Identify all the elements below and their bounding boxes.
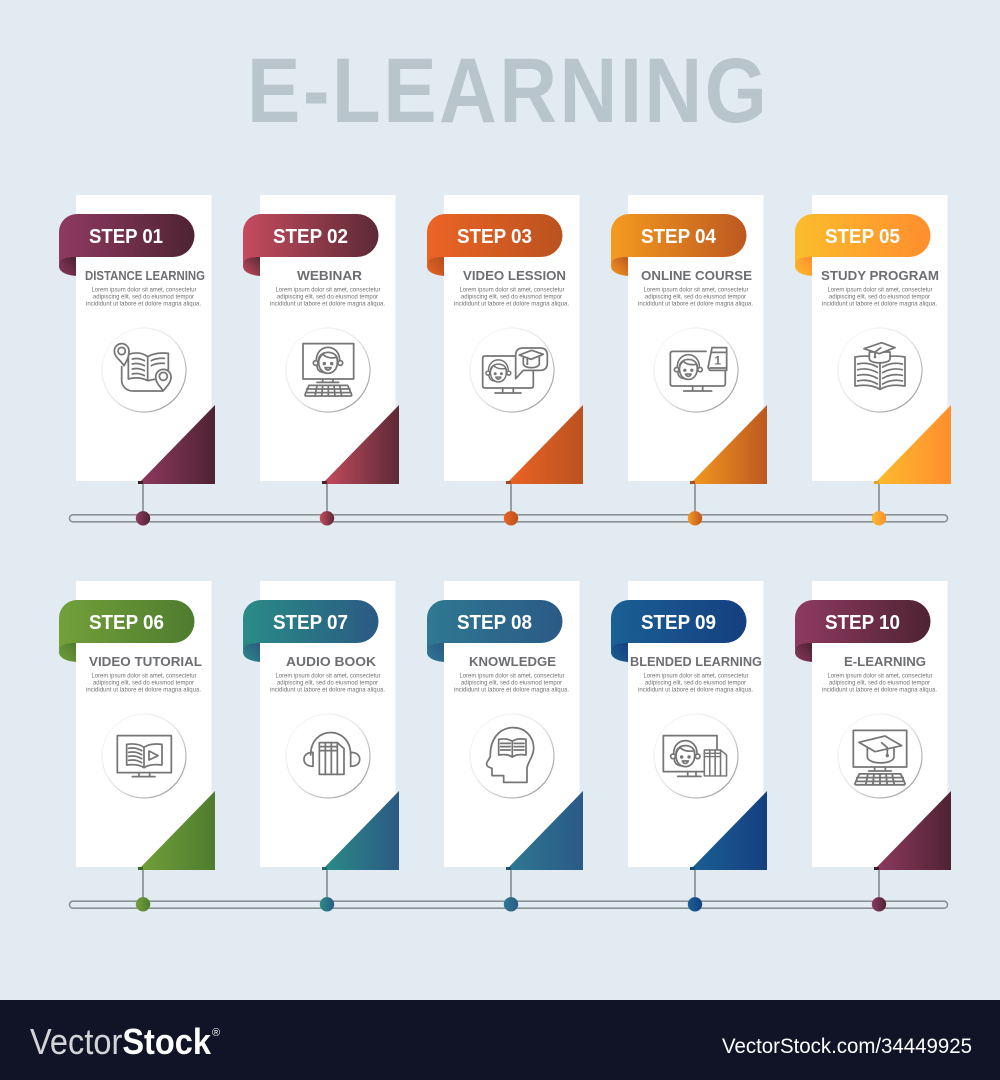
ribbon [243,600,378,662]
heading: ONLINE COURSE [641,268,752,283]
step label: STEP 07 [273,611,348,634]
corner triangle [138,405,215,484]
body text: incididunt ut labore et dolore magna aliqua. [270,686,385,694]
step label: STEP 06 [89,611,164,634]
panel: step 05 [795,195,951,526]
body text: incididunt ut labore et dolore magna aliqua. [270,300,385,308]
body text: adipiscing elit, sed do eiusmod tempor [829,294,931,300]
card [260,195,396,481]
body text: adipiscing elit, sed do eiusmod tempor [645,680,747,686]
body text [86,286,201,308]
card [444,195,580,481]
ribbon [59,600,194,662]
body text: incididunt ut labore et dolore magna aliqua. [822,300,937,308]
panel: step 09 [611,581,767,912]
body text: Lorem ipsum dolor sit amet, consectetur [92,286,197,294]
ribbon [611,214,746,276]
card [444,581,580,867]
body text: Lorem ipsum dolor sit amet, consectetur [92,672,197,680]
panel: step 07 [243,581,399,912]
ribbon [243,214,378,276]
corner triangle [874,791,951,870]
connector stem [142,484,144,518]
card [812,581,948,867]
corner triangle [138,791,215,870]
step label: STEP 08 [457,611,532,634]
timeline dot [504,511,518,526]
timeline track: row 1 [70,515,948,522]
body text: Lorem ipsum dolor sit amet, consectetur [460,672,565,680]
body text: incididunt ut labore et dolore magna aliqua. [86,686,201,694]
body text: incididunt ut labore et dolore magna aliqua. [822,686,937,694]
registered mark: ® [212,1027,220,1039]
panel: step 04 [611,195,767,526]
panel: step 10 [795,581,951,912]
body text: incididunt ut labore et dolore magna aliqua. [638,300,753,308]
body text [638,672,753,694]
heading: AUDIO BOOK [286,654,377,669]
icon: webinar computer [286,328,370,412]
corner triangle [322,405,399,484]
card [812,195,948,481]
step label: STEP 10 [825,611,900,634]
timeline dot [872,511,886,526]
heading: KNOWLEDGE [469,654,556,669]
timeline dot [504,897,518,912]
step label: STEP 05 [825,225,900,248]
icon: online course: 1 [714,353,721,367]
icon: audio book [286,714,370,798]
body text: Lorem ipsum dolor sit amet, consectetur [276,286,381,294]
connector stem [326,870,328,904]
card [628,195,764,481]
panel: step 08 [427,581,583,912]
connector stem [878,484,880,518]
connector stem [326,484,328,518]
body text [822,672,937,694]
icon: head with book [470,714,554,798]
body text: Lorem ipsum dolor sit amet, consectetur [828,672,933,680]
heading: DISTANCE LEARNING [85,268,205,283]
timeline dot [688,897,702,912]
connector stem [878,870,880,904]
body text: Lorem ipsum dolor sit amet, consectetur [644,286,749,294]
body text: adipiscing elit, sed do eiusmod tempor [461,294,563,300]
timeline dot [320,897,334,912]
title: E-LEARNING [247,40,769,142]
corner triangle [506,405,583,484]
body text [454,672,569,694]
ribbon [59,214,194,276]
icon: blended learning [654,714,738,798]
body text: Lorem ipsum dolor sit amet, consectetur [644,672,749,680]
body text: adipiscing elit, sed do eiusmod tempor [461,680,563,686]
step label: STEP 01 [89,225,163,248]
ribbon [427,214,562,276]
step label: STEP 02 [273,225,348,248]
panel: step 03 [427,195,583,526]
body text: adipiscing elit, sed do eiusmod tempor [645,294,747,300]
corner triangle [690,791,767,870]
body text [454,286,569,308]
ribbon [611,600,746,662]
corner triangle [874,405,951,484]
body text: incididunt ut labore et dolore magna aliqua. [454,686,569,694]
heading: VIDEO LESSION [463,268,566,283]
ribbon [795,214,930,276]
timeline dot [688,511,702,526]
corner triangle [506,791,583,870]
body text: adipiscing elit, sed do eiusmod tempor [93,680,195,686]
panel: step 06 [59,581,215,912]
timeline dot [872,897,886,912]
body text: incididunt ut labore et dolore magna aliqua. [638,686,753,694]
icon: e-learning computer [838,714,922,798]
footer bar [0,1000,1000,1080]
card [260,581,396,867]
corner triangle [322,791,399,870]
ribbon [795,600,930,662]
ribbon [427,600,562,662]
icon: map book [102,328,186,412]
step label: STEP 04 [641,225,717,248]
icon: online course [654,328,738,412]
body text [270,286,385,308]
body text [822,286,937,308]
heading: BLENDED LEARNING [630,654,762,669]
body text [270,672,385,694]
step label: STEP 09 [641,611,716,634]
connector stem [510,484,512,518]
footer logo: VectorStock [30,1021,212,1062]
timeline dot [136,897,150,912]
body text: Lorem ipsum dolor sit amet, consectetur [276,672,381,680]
connector stem [694,870,696,904]
heading: WEBINAR [297,268,363,283]
timeline track: row 2 [70,901,948,908]
icon: graduation book [838,328,922,412]
body text: Lorem ipsum dolor sit amet, consectetur [460,286,565,294]
heading: VIDEO TUTORIAL [89,654,202,669]
body text: adipiscing elit, sed do eiusmod tempor [277,294,379,300]
card [76,195,212,481]
body text: Lorem ipsum dolor sit amet, consectetur [828,286,933,294]
footer image id: VectorStock.com/34449925 [722,1035,972,1058]
body text: adipiscing elit, sed do eiusmod tempor [93,294,195,300]
body text: incididunt ut labore et dolore magna aliqua. [86,300,201,308]
body text: adipiscing elit, sed do eiusmod tempor [829,680,931,686]
body text [86,672,201,694]
icon: video tutorial [102,714,186,798]
timeline dot [320,511,334,526]
heading: E-LEARNING [844,654,926,669]
connector stem [694,484,696,518]
connector stem [510,870,512,904]
step label: STEP 03 [457,225,532,248]
panel: step 02 [243,195,399,526]
corner triangle [690,405,767,484]
body text: adipiscing elit, sed do eiusmod tempor [277,680,379,686]
card [76,581,212,867]
heading: STUDY PROGRAM [821,268,939,283]
body text [638,286,753,308]
icon: video lesson [470,328,554,412]
panel: step 01 [59,195,215,526]
connector stem [142,870,144,904]
timeline dot [136,511,150,526]
card [628,581,764,867]
body text: incididunt ut labore et dolore magna aliqua. [454,300,569,308]
